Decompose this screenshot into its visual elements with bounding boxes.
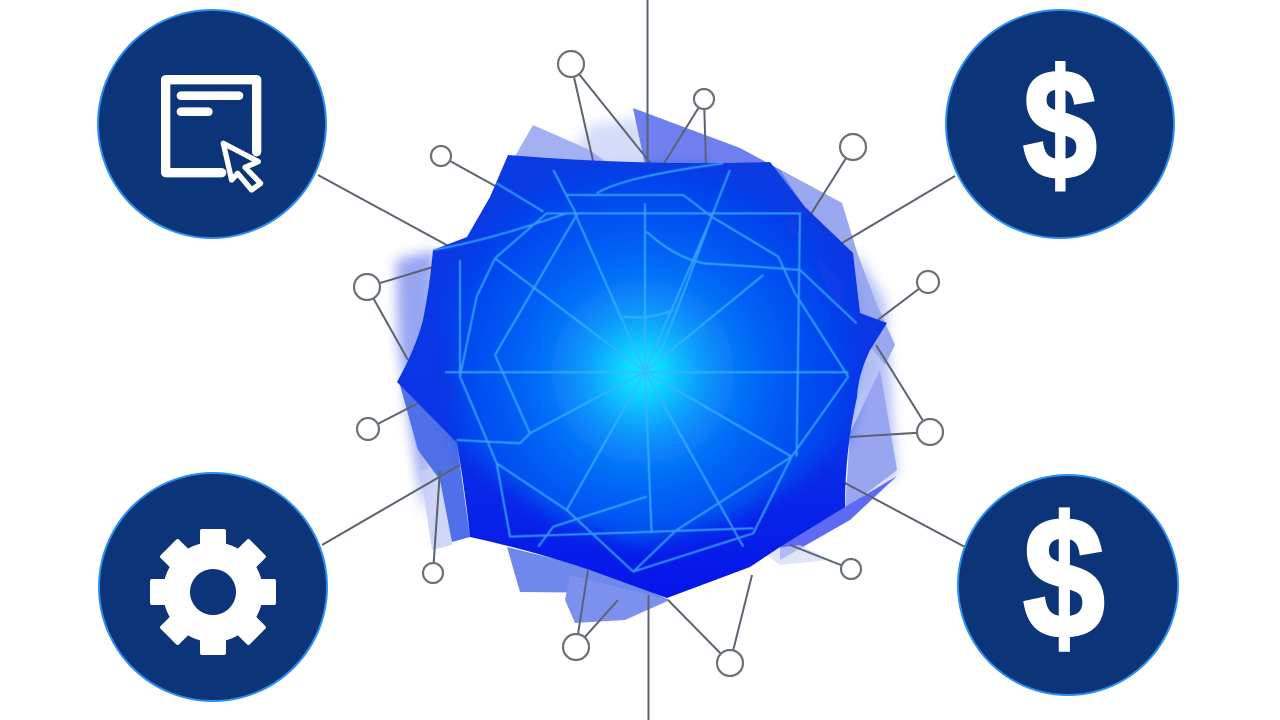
icon: window with cursor: [166, 80, 261, 190]
node rings: [354, 51, 943, 676]
hub connector bottom right: [845, 483, 965, 547]
panel: bottom left gear badge: [99, 473, 327, 701]
hub connector top left: [318, 175, 465, 255]
vertical spine top: [646, 0, 648, 170]
dark polygon body: [397, 155, 887, 598]
badge circle: [946, 10, 1174, 238]
central blue sphere: [397, 155, 887, 598]
connector lines and nodes: [318, 0, 965, 720]
node branches: [367, 64, 930, 663]
icon: gear: [150, 529, 276, 655]
panel: top right dollar badge: [946, 10, 1174, 238]
panel: bottom right dollar badge: [958, 475, 1178, 695]
badge circle: [958, 475, 1178, 695]
translucent back shards: [396, 108, 897, 623]
glowing radial core: [445, 172, 855, 545]
panel: top left window and cursor badge: [98, 10, 326, 238]
icon: dollar sign: $: [1023, 482, 1105, 674]
icon: dollar sign: $: [1023, 39, 1097, 211]
badge circle: [99, 473, 327, 701]
wireframe network: [433, 163, 857, 572]
hub connector top right: [800, 176, 955, 268]
badge circle: [98, 10, 326, 238]
hub connector bottom left: [322, 465, 460, 545]
vertical spine bottom: [648, 595, 650, 720]
